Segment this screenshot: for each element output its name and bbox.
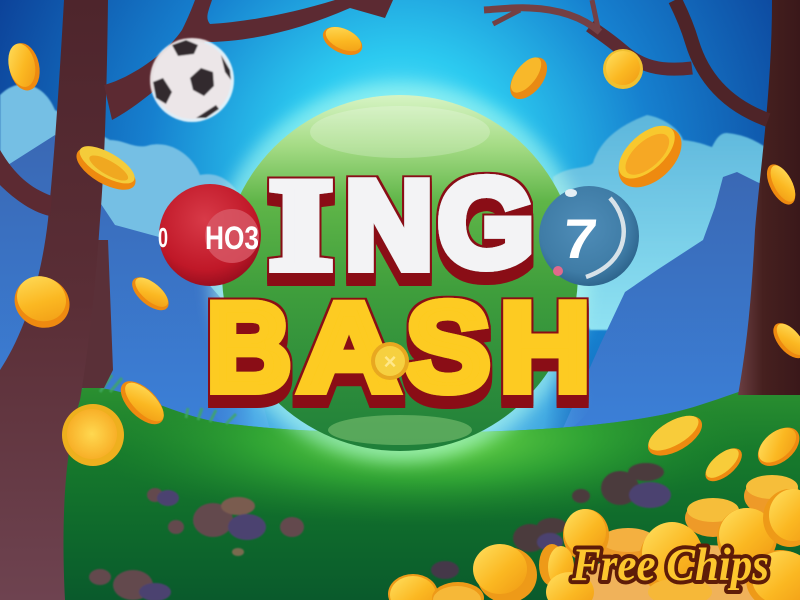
- bubble glow: [210, 82, 590, 462]
- left tree: [0, 0, 393, 600]
- right tree: [484, 0, 800, 395]
- mountains: [0, 135, 800, 435]
- title: ING: G: [438, 155, 534, 293]
- red bingo ball: HO3: [205, 220, 259, 256]
- title: ING: [270, 153, 534, 296]
- title: BASH: H: [500, 279, 590, 417]
- small coin on title: ×: [384, 349, 396, 374]
- title: BASH: S: [406, 279, 490, 417]
- title: BASH: A: [299, 279, 399, 417]
- title: ING: I: [270, 153, 332, 296]
- rocks: [89, 463, 671, 600]
- red bingo ball: 0: [158, 222, 168, 253]
- red bingo ball: [158, 184, 261, 286]
- title: BASH: [207, 279, 590, 417]
- title: ING: N: [345, 157, 433, 295]
- flying coins: [5, 21, 800, 487]
- big green bubble: [222, 95, 578, 451]
- grass tufts: [100, 366, 795, 424]
- soccer ball: [150, 38, 234, 122]
- horizon glow: [205, 310, 595, 470]
- ground hill: [64, 388, 800, 600]
- blue bingo ball: 7: [560, 207, 600, 270]
- Free Chips label: Free Chips: [571, 539, 769, 591]
- left back trunk: [82, 240, 113, 388]
- coin pile: [388, 475, 800, 600]
- title: BASH: B: [207, 279, 291, 417]
- small coin on title: [371, 342, 409, 380]
- blue bingo ball: [539, 186, 639, 286]
- clouds: [0, 84, 770, 330]
